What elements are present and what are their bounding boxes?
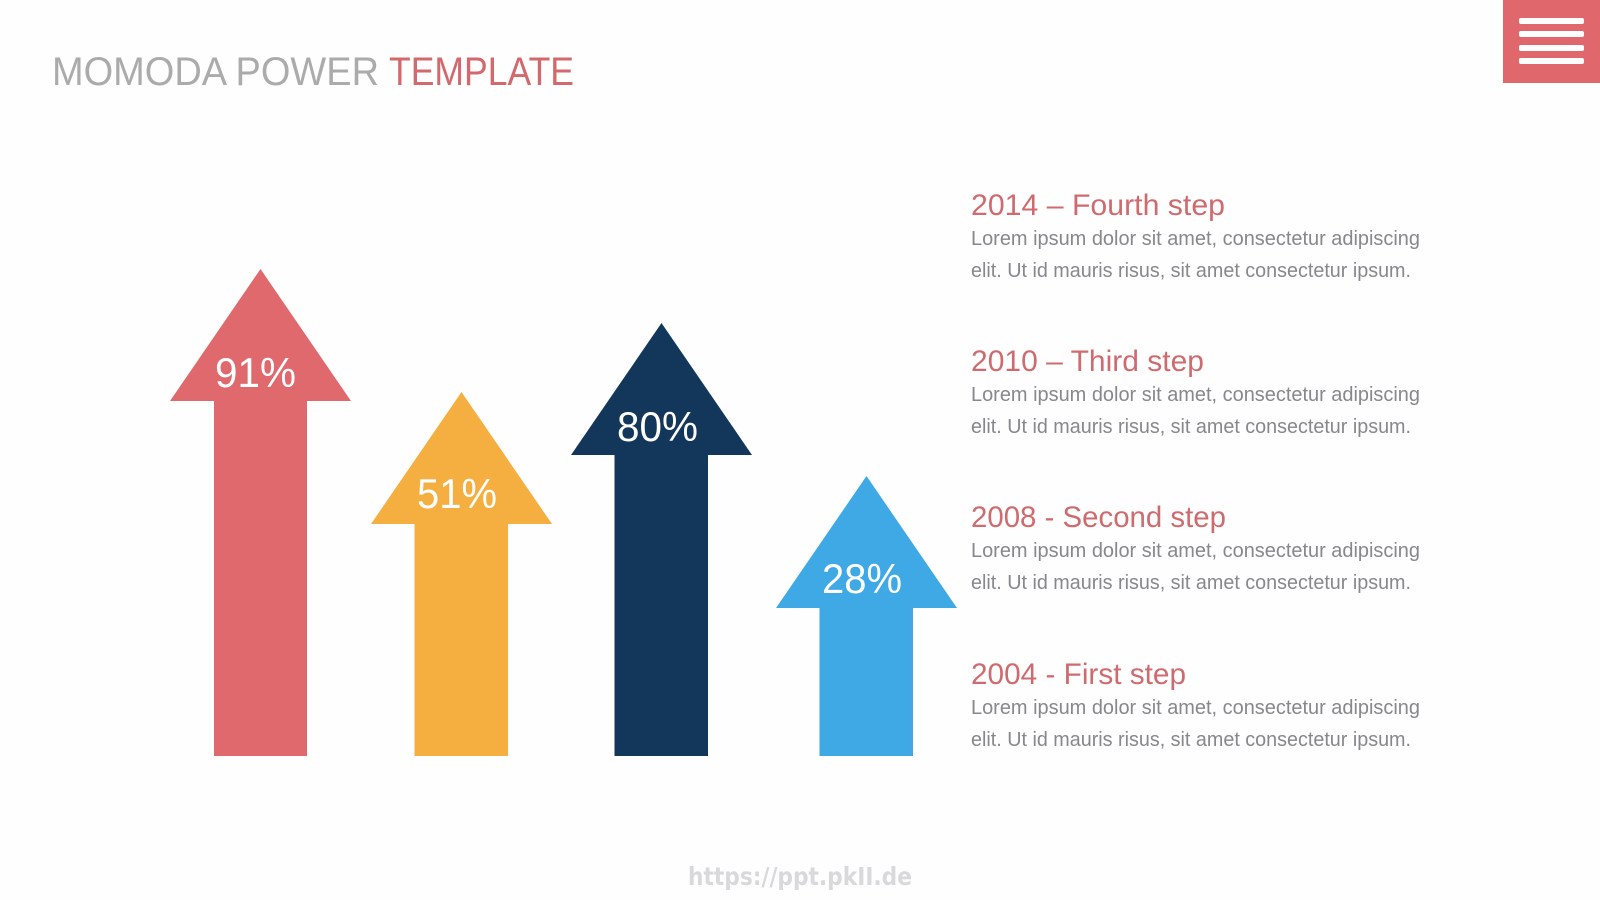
text block: 2010 third step [971,345,1420,438]
text block: 2004 first step: 2004 - First step [971,658,1186,691]
text block: 2010 third step: elit. Ut id mauris risus, sit amet consectetur ipsum. [971,415,1411,438]
text block: 2014 fourth step: 2014 – Fourth step [971,189,1225,222]
text block: 2004 first step: elit. Ut id mauris risus, sit amet consectetur ipsum. [971,728,1411,751]
icon: menu button [1503,0,1600,83]
text block: 2014 fourth step: elit. Ut id mauris risus, sit amet consectetur ipsum. [971,259,1411,282]
arrow: 51%: 51% [417,470,497,517]
title: MOMODA POWER [52,50,379,94]
arrow: 28%: 28% [822,555,902,602]
arrow: 91% [170,269,351,756]
text block: 2014 fourth step: Lorem ipsum dolor sit amet, consectetur adipiscing [971,227,1420,250]
text block: 2008 second step [971,501,1420,594]
text block: 2014 fourth step [971,189,1420,282]
arrow: 28% [776,476,957,756]
text block: 2010 third step: Lorem ipsum dolor sit amet, consectetur adipiscing [971,383,1420,406]
title: TEMPLATE [389,50,574,94]
text block: 2004 first step [971,658,1420,751]
text block: 2008 second step: 2008 - Second step [971,501,1226,534]
arrow: 80%: 80% [617,403,698,450]
arrow: 91%: 91% [215,349,296,396]
text block: 2008 second step: Lorem ipsum dolor sit amet, consectetur adipiscing [971,539,1420,562]
watermark url: https://ppt.pkII.de [688,862,912,891]
text block: 2004 first step: Lorem ipsum dolor sit amet, consectetur adipiscing [971,696,1420,719]
arrow: 80% [571,323,752,756]
text block: 2010 third step: 2010 – Third step [971,345,1204,378]
title [52,50,574,94]
arrow: 51% [371,392,552,756]
text block: 2008 second step: elit. Ut id mauris risus, sit amet consectetur ipsum. [971,571,1411,594]
